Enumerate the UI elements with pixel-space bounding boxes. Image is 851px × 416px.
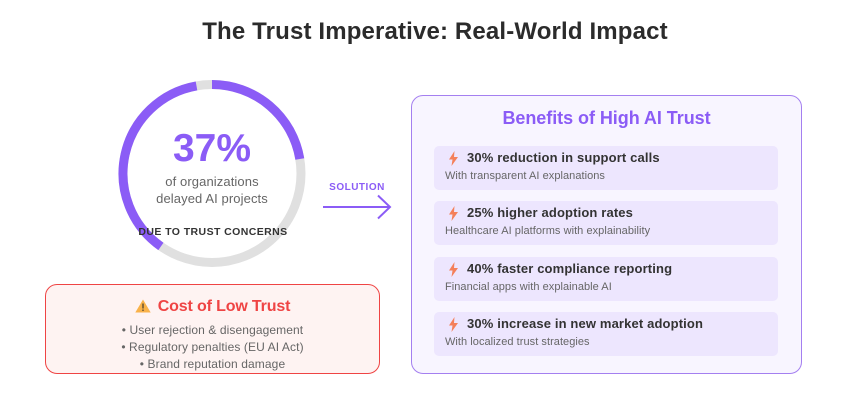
- benefit 1: 30% reduction in support calls: [467, 150, 660, 165]
- arrow: [323, 194, 392, 220]
- benefit 2: [434, 201, 778, 245]
- benefit 4: With localized trust strategies: [445, 336, 590, 348]
- cost list: • Brand reputation damage: [140, 356, 285, 370]
- statistic: 37%: 37%: [173, 127, 251, 170]
- benefit 4: [434, 312, 778, 356]
- panel: cost of low trust: [45, 284, 380, 374]
- icon: lightning: [449, 317, 458, 332]
- statistic description: of organizations: [165, 174, 259, 188]
- icon: lightning: [449, 151, 458, 166]
- cost heading: Cost of Low Trust: [158, 298, 290, 315]
- benefit 3: 40% faster compliance reporting: [467, 261, 672, 276]
- cost list: [121, 322, 304, 370]
- statistic description: [156, 174, 268, 206]
- benefits heading: Benefits of High AI Trust: [502, 108, 711, 128]
- solution label: SOLUTION: [329, 182, 385, 192]
- cost list: • Regulatory penalties (EU AI Act): [121, 340, 304, 354]
- icon: lightning: [449, 206, 458, 221]
- benefit 3: [434, 257, 778, 301]
- donut chart: 37%: [118, 80, 306, 267]
- benefit 3: Financial apps with explainable AI: [445, 280, 612, 292]
- benefit 4: 30% increase in new market adoption: [467, 316, 703, 331]
- donut caption: DUE TO TRUST CONCERNS: [138, 226, 288, 238]
- title: The Trust Imperative: Real-World Impact: [202, 18, 668, 45]
- statistic description: delayed AI projects: [156, 190, 268, 206]
- benefit 1: [434, 146, 778, 190]
- cost list: • User rejection & disengagement: [122, 322, 303, 336]
- benefit 2: 25% higher adoption rates: [467, 205, 633, 220]
- icon: lightning: [449, 262, 458, 277]
- benefit 1: With transparent AI explanations: [445, 170, 605, 182]
- benefit 2: Healthcare AI platforms with explainability: [445, 224, 650, 236]
- panel: benefits of high AI trust: [411, 95, 802, 374]
